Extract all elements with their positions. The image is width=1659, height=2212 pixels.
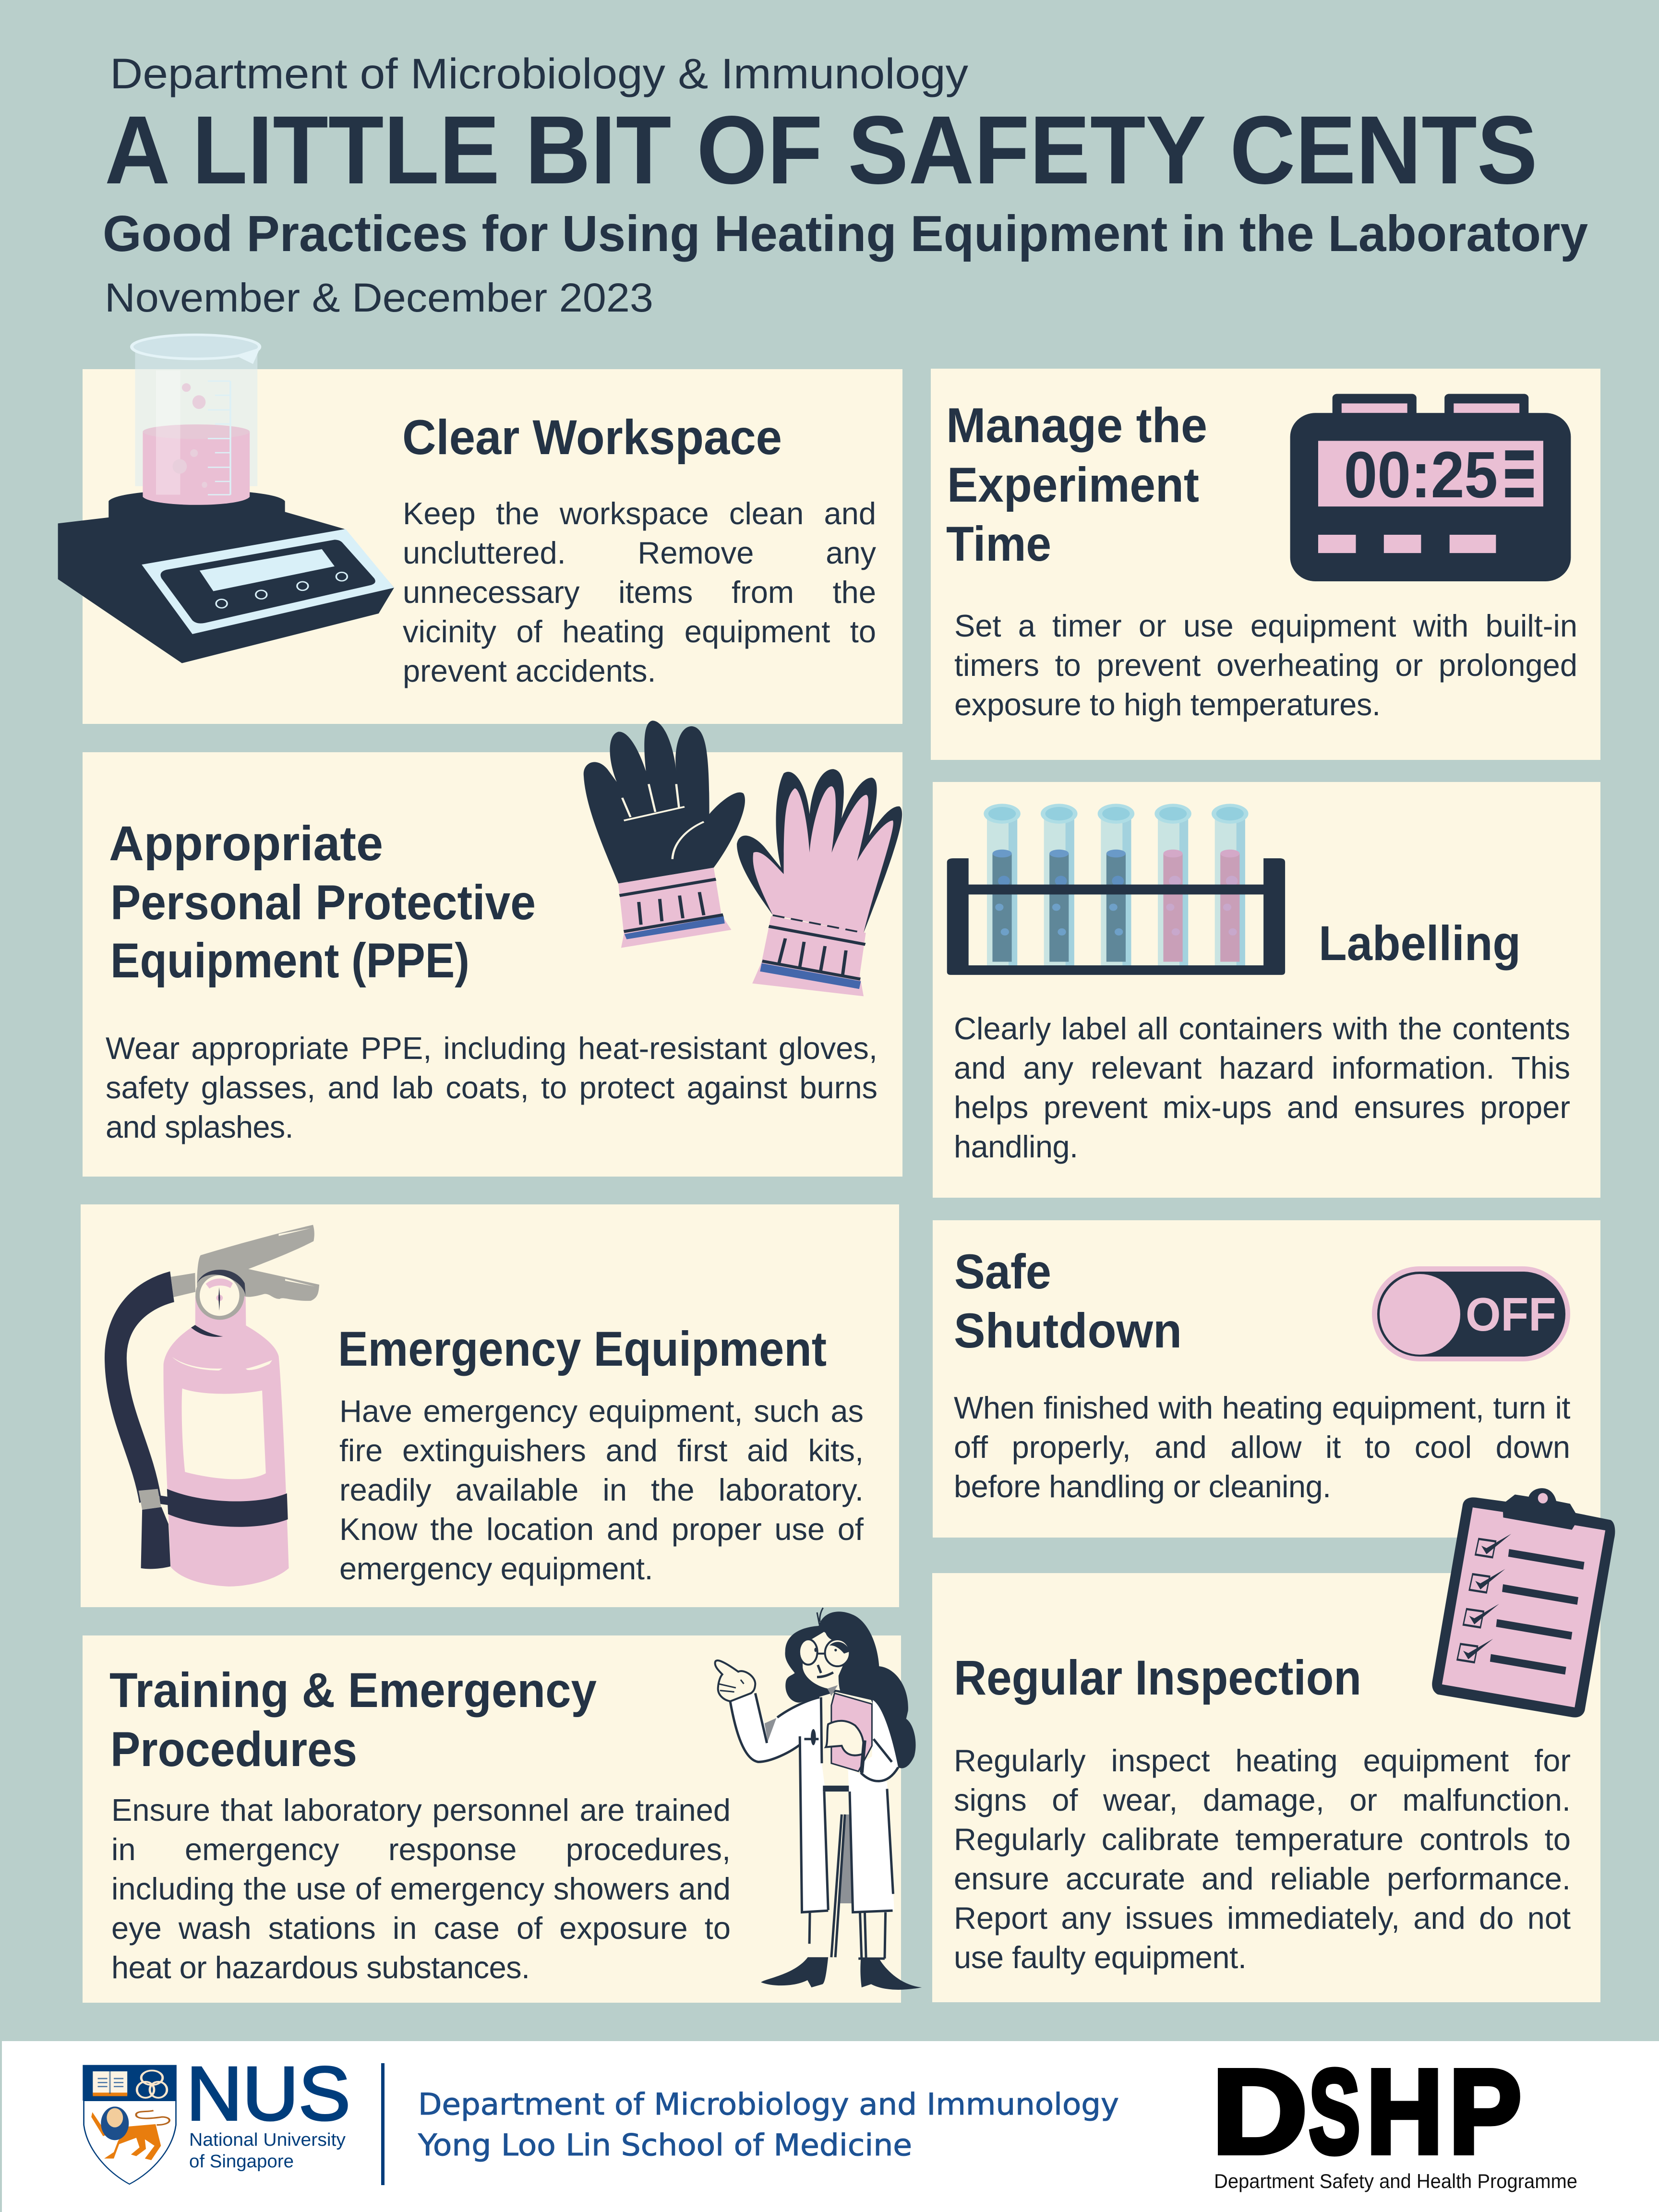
heading: emergency equipment: Emergency Equipment <box>338 1322 827 1376</box>
heading: manage the experiment time: Manage the <box>946 398 1207 453</box>
main title: A LITTLE BIT OF SAFETY CENTS <box>105 96 1538 204</box>
icon: off toggle switch: OFF <box>1466 1288 1556 1341</box>
heading: appropriate personal protective equipment: Equipment (PPE) <box>110 933 469 988</box>
body text: regular inspection: Report any issues immediately, and do not <box>954 1900 1571 1936</box>
heading: safe shutdown: Shutdown <box>954 1303 1182 1358</box>
panel: regular inspection <box>932 1573 1600 2002</box>
body text: safe shutdown: When finished with heating equipment, turn it <box>954 1390 1570 1425</box>
divider <box>381 2063 385 2185</box>
heading: appropriate personal protective equipment <box>109 816 536 988</box>
logo: NUS wordmark: National University <box>189 2130 346 2150</box>
body text: training: heat or hazardous substances. <box>111 1950 530 1985</box>
footer band <box>2 2041 1659 2212</box>
body text: labelling <box>954 1011 1570 1164</box>
body text: manage time: exposure to high temperatures. <box>954 687 1381 722</box>
icon: heat-resistant gloves <box>584 721 902 996</box>
logo: NUS shield <box>83 2065 177 2184</box>
icon: off toggle switch <box>1372 1266 1570 1361</box>
body text: clear workspace: unnecessary items from the <box>403 575 876 610</box>
department name: Yong Loo Lin School of Medicine <box>418 2128 912 2163</box>
body text: training: including the use of emergency showers and <box>111 1871 731 1906</box>
heading: manage the experiment time: Experiment <box>947 457 1199 512</box>
logo: DSHP: S <box>1309 2044 1360 2178</box>
panel: manage the experiment time <box>931 369 1600 760</box>
body text: emergency equipment: readily available in the laboratory. <box>339 1472 864 1507</box>
body text: PPE: Wear appropriate PPE, including heat-resistant gloves, <box>106 1031 878 1066</box>
logo: DSHP: D <box>1212 2044 1308 2178</box>
body text: PPE: and splashes. <box>106 1109 293 1144</box>
panel: appropriate PPE <box>83 752 902 1177</box>
icon: scientist in lab coat <box>715 1608 922 1990</box>
body text: manage time: Set a timer or use equipment with built-in <box>954 608 1577 643</box>
panel: emergency equipment <box>81 1204 899 1607</box>
body text: safe shutdown: off properly, and allow it to cool down <box>954 1430 1570 1465</box>
body text: safe shutdown: before handling or cleaning. <box>954 1469 1331 1504</box>
body text: training <box>111 1792 731 1985</box>
heading: safe shutdown <box>954 1244 1182 1358</box>
heading: training and emergency procedures: Procedures <box>110 1722 357 1777</box>
logo: NUS wordmark: of Singapore <box>189 2152 294 2172</box>
body text: labelling: handling. <box>954 1129 1078 1164</box>
icon: digital timer: 00:25 <box>1344 438 1498 512</box>
header block <box>103 49 1588 320</box>
heading: clear workspace: Clear Workspace <box>402 410 782 465</box>
heading: appropriate personal protective equipment: Appropriate <box>109 816 383 871</box>
heading: training and emergency procedures <box>109 1663 597 1777</box>
heading: safe shutdown: Safe <box>954 1244 1051 1299</box>
DSHP caption: Department Safety and Health Programme <box>1214 2170 1577 2192</box>
body text: clear workspace: prevent accidents. <box>403 653 656 688</box>
body text: PPE <box>106 1031 878 1144</box>
body text: regular inspection: use faulty equipment. <box>954 1940 1246 1975</box>
panel: clear workspace <box>83 369 902 724</box>
body text: labelling: Clearly label all containers with the contents <box>954 1011 1570 1046</box>
body text: manage time <box>954 608 1577 722</box>
subtitle: Good Practices for Using Heating Equipment in the Laboratory <box>103 205 1588 262</box>
heading: labelling: Labelling <box>1319 916 1521 971</box>
logo: NUS wordmark <box>186 2051 350 2172</box>
icon: checklist clipboard <box>1432 1488 1615 1718</box>
body text: labelling: and any relevant hazard information. This <box>954 1050 1570 1085</box>
body text: regular inspection: Regularly calibrate temperature controls to <box>954 1822 1571 1857</box>
body text: emergency equipment: Have emergency equipment, such as <box>339 1394 864 1429</box>
heading: regular inspection: Regular Inspection <box>954 1650 1361 1705</box>
body text: regular inspection: signs of wear, damage, or malfunction. <box>954 1782 1571 1817</box>
body text: clear workspace: uncluttered. Remove any <box>403 535 876 570</box>
body text: emergency equipment: fire extinguishers and first aid kits, <box>339 1433 864 1468</box>
heading: training and emergency procedures: Training & Emergency <box>109 1663 597 1718</box>
panel: safe shutdown <box>933 1220 1600 1538</box>
panel: training and emergency procedures <box>83 1635 901 2003</box>
body text: regular inspection <box>954 1743 1571 1975</box>
icon: test tube rack <box>947 804 1285 975</box>
heading: manage the experiment time: Time <box>946 517 1051 571</box>
body text: manage time: timers to prevent overheating or prolonged <box>954 648 1577 683</box>
logo: DSHP: H <box>1366 2044 1443 2178</box>
body text: labelling: helps prevent mix-ups and ensures proper <box>954 1090 1570 1125</box>
body text: emergency equipment: emergency equipment. <box>339 1551 653 1586</box>
logo: DSHP <box>1212 2044 1522 2178</box>
body text: training: Ensure that laboratory personnel are trained <box>111 1792 731 1827</box>
department line: Department of Microbiology & Immunology <box>110 49 969 97</box>
body text: PPE: safety glasses, and lab coats, to protect against burns <box>106 1070 878 1105</box>
body text: training: eye wash stations in case of exposure to <box>111 1911 731 1946</box>
heading: appropriate personal protective equipment: Personal Protective <box>110 875 536 930</box>
heading: manage the experiment time <box>946 398 1207 571</box>
body text: clear workspace: vicinity of heating equipment to <box>403 614 876 649</box>
department name <box>418 2087 1119 2163</box>
body text: safe shutdown <box>954 1390 1570 1504</box>
body text: emergency equipment <box>339 1394 864 1586</box>
body text: training: in emergency response procedures, <box>111 1832 731 1867</box>
body text: emergency equipment: Know the location and proper use of <box>339 1512 864 1547</box>
icon: digital timer <box>1290 394 1571 581</box>
body text: regular inspection: ensure accurate and reliable performance. <box>954 1861 1571 1896</box>
panel: labelling <box>933 782 1600 1198</box>
date: November & December 2023 <box>105 275 653 320</box>
body text: clear workspace: Keep the workspace clean and <box>403 496 876 531</box>
icon: beaker on hot plate <box>58 335 394 663</box>
icon: fire extinguisher <box>116 1225 319 1587</box>
logo: NUS wordmark: NUS <box>186 2051 350 2136</box>
body text: regular inspection: Regularly inspect heating equipment for <box>954 1743 1571 1778</box>
body text: clear workspace <box>403 496 876 688</box>
logo: DSHP: P <box>1449 2044 1522 2178</box>
department name: Department of Microbiology and Immunology <box>418 2087 1119 2122</box>
